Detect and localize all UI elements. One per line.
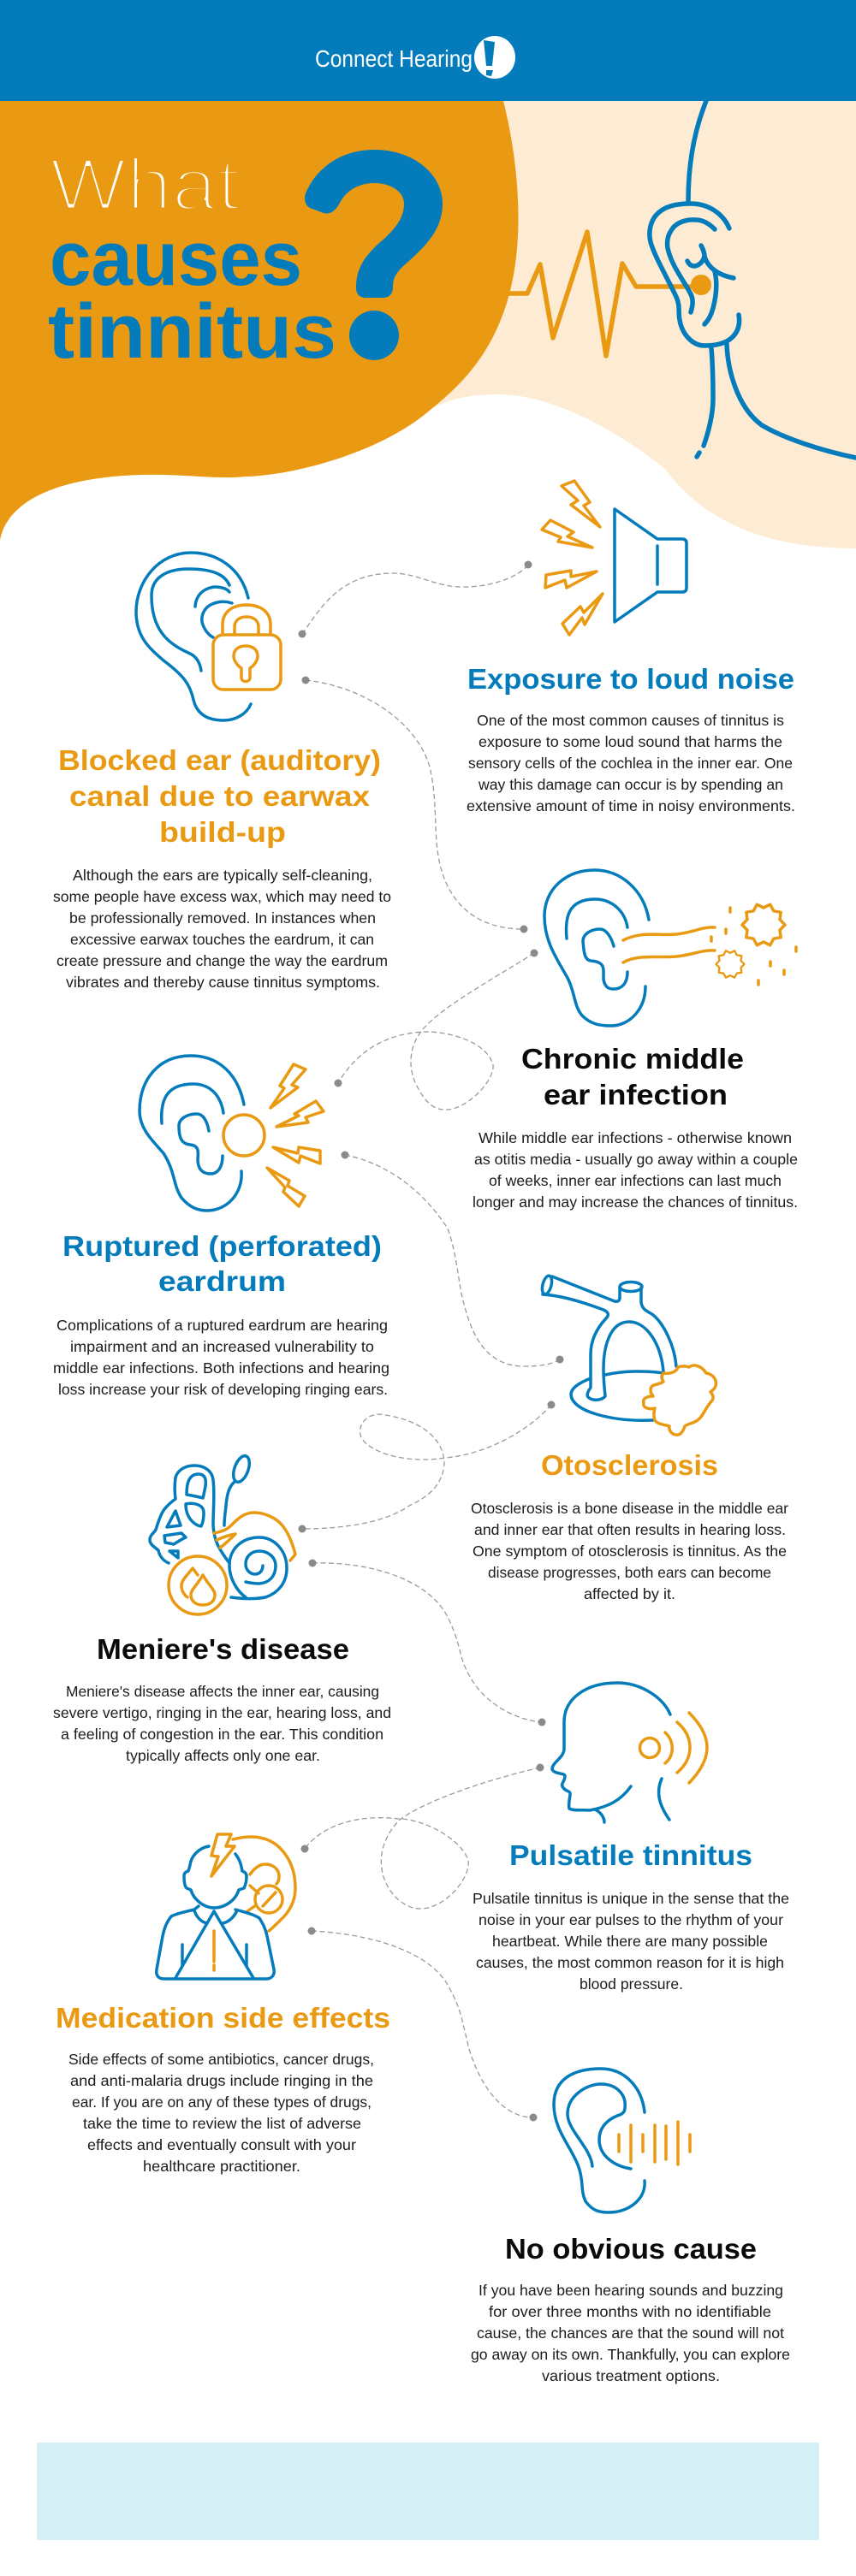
body text: exposure to some loud sound that harms the [479,733,782,750]
heading: build-up [159,816,286,848]
body text: extensive amount of time in noisy environments. [467,797,795,814]
body text [53,1317,389,1398]
body text: One symptom of otosclerosis is tinnitus. As the [473,1543,787,1560]
heading: eardrum [158,1265,286,1297]
body text: affected by it. [584,1585,675,1602]
panel: otosclerosis [471,1275,788,1602]
body text: typically affects only one ear. [126,1747,320,1764]
icon: stapes bone with growth [540,1275,716,1435]
header bar [0,0,856,101]
heading: ear infection [544,1079,728,1110]
icon: ear with infection [544,870,796,1026]
body text: for over three months with no identifiable [489,2303,771,2320]
body text: vibrates and thereby cause tinnitus symptoms. [66,974,380,991]
heading: Medication side effects [56,2002,390,2034]
body text: If you have been hearing sounds and buzzing [479,2282,783,2299]
body text: causes, the most common reason for it is high [476,1954,784,1971]
panel: chronic middle ear infection [473,870,798,1211]
title: causes [50,216,302,302]
body text [68,2051,374,2175]
body text: heartbeat. While there are many possible [492,1933,768,1950]
body text: of weeks, inner ear infections can last much [489,1172,782,1189]
heading: canal due to earwax [69,780,371,812]
body text: While middle ear infections - otherwise known [479,1129,792,1146]
panel: ruptured eardrum [53,1056,389,1398]
icon: loudspeaker with bolts [542,481,687,635]
body text [473,1129,798,1211]
connector 2 [301,676,527,933]
connector 5 [298,1401,555,1533]
title: tinnitus [48,289,336,375]
heading: No obvious cause [505,2233,757,2265]
body text: and anti-malaria drugs include ringing in the [70,2072,373,2089]
body text: cause, the chances are that the sound will not [477,2324,784,2342]
body text: sensory cells of the cochlea in the inner ear. One [468,755,793,772]
icon: head with pulses [552,1683,707,1822]
body text: effects and eventually consult with your [87,2136,356,2153]
body text: Pulsatile tinnitus is unique in the sense that the [473,1890,789,1907]
body text: be professionally removed. In instances when [69,909,376,927]
icon: big question mark [305,150,443,360]
panel: no obvious cause [471,2069,790,2384]
body text [53,1683,391,1764]
body text: and inner ear that often results in hearing loss. [474,1521,786,1538]
body text: way this damage can occur is by spending an [478,776,783,793]
body text: One of the most common causes of tinnitus is [477,712,784,729]
heading [521,1043,744,1110]
heading [62,1230,382,1297]
title: What [50,144,240,226]
icon: ear with padlock [136,553,281,720]
heading [58,744,381,848]
orange hero blob [0,101,519,582]
body text: Side effects of some antibiotics, cancer drugs, [68,2051,374,2068]
hero illustration: ear and sound wave [507,101,856,458]
body text: Otosclerosis is a bone disease in the middle ear [471,1500,788,1517]
body text: Complications of a ruptured eardrum are hearing [56,1317,388,1334]
body text: some people have excess wax, which may need to [53,888,391,905]
connector 7 [301,1764,544,1909]
logo: Connect Hearing: Connect Hearing [315,45,473,72]
body text: loss increase your risk of developing ringing ears. [58,1381,388,1398]
icon: ear with sound bars [554,2069,690,2212]
panel: exposure to loud noise [467,481,795,814]
body text: middle ear infections. Both infections and hearing [53,1359,389,1377]
cream hero background [0,101,856,580]
logo: Connect Hearing [315,36,515,79]
icon: inner ear and cochlea [150,1454,295,1614]
body text: a feeling of congestion in the ear. This condition [61,1726,383,1743]
body text: ear. If you are on any of these types of drugs, [72,2093,372,2111]
body text: severe vertigo, ringing in the ear, hearing loss, and [53,1704,391,1721]
panel: pulsatile tinnitus [473,1683,789,1993]
body text: go away on its own. Thankfully, you can explore [471,2346,790,2363]
icon: ear with ruptured drum [140,1056,324,1211]
body text: blood pressure. [580,1975,683,1993]
icon: person with pills [157,1834,295,1979]
body text: noise in your ear pulses to the rhythm of your [479,1911,783,1928]
connector 6 [308,1559,546,1726]
body text: excessive earwax touches the eardrum, it can [70,931,374,948]
body text: as otitis media - usually go away within a couple [474,1151,798,1168]
heading: Pulsatile tinnitus [509,1839,752,1871]
body text [53,867,391,991]
body text: impairment and an increased vulnerability to [70,1338,374,1355]
body text: Meniere's disease affects the inner ear, causing [66,1683,379,1700]
heading: Blocked ear (auditory) [58,744,381,776]
body text: take the time to review the list of adverse [83,2115,361,2132]
body text [473,1890,789,1993]
body text [471,2282,790,2384]
heading: Chronic middle [521,1043,744,1075]
body text [467,712,795,814]
body text: longer and may increase the chances of tinnitus. [473,1193,798,1211]
connector 4 [341,1152,563,1366]
body text: various treatment options. [542,2367,720,2384]
heading: Otosclerosis [541,1449,718,1481]
heading: Ruptured (perforated) [62,1230,382,1262]
body text: Although the ears are typically self-cleaning, [73,867,372,884]
heading: Meniere's disease [97,1633,349,1665]
title [48,144,336,375]
connector 3 [334,950,538,1110]
heading: Exposure to loud noise [467,663,794,695]
body text: healthcare practitioner. [143,2158,300,2175]
connector 1 [298,561,532,638]
panel: medication side effects [56,1834,390,2175]
body text [471,1500,788,1602]
body text: create pressure and change the way the eardrum [56,952,388,969]
body text: disease progresses, both ears can become [488,1564,771,1581]
connector 8 [308,1927,538,2122]
panel: blocked ear [53,553,391,991]
footer box [37,2443,819,2540]
panel: meniere's disease [53,1454,391,1764]
